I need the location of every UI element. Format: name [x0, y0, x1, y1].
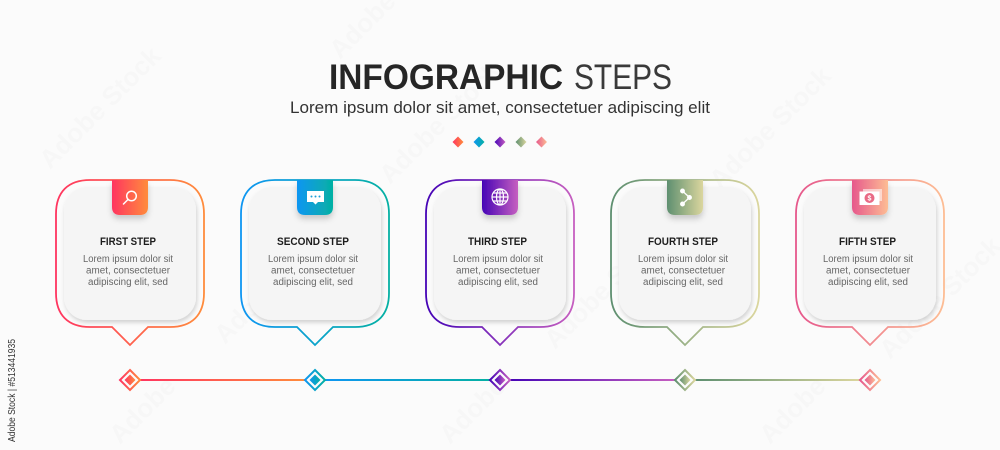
- body text: Lorem ipsum dolor sit: [638, 254, 728, 265]
- body text: amet, consectetuer: [456, 266, 541, 276]
- panel: second step: [241, 180, 389, 345]
- body text: [823, 254, 913, 288]
- watermark pattern: Adobe Stock: [703, 60, 837, 194]
- stock id caption: Adobe Stock | #513441935: [6, 339, 18, 442]
- icon: magnifier: [124, 191, 136, 204]
- body text: amet, consectetuer: [271, 266, 356, 276]
- inner card: [249, 187, 381, 320]
- tab: [667, 180, 703, 215]
- body text: Lorem ipsum dolor sit: [268, 254, 358, 265]
- watermark pattern: Adobe Stock: [33, 40, 167, 174]
- outline callout: [611, 180, 759, 345]
- subtitle: Lorem ipsum dolor sit amet, consectetuer adipiscing elit: [290, 98, 710, 117]
- heading: FIRST STEP: [100, 236, 156, 248]
- watermark pattern: Adobe: [103, 371, 181, 449]
- title: STEPS: [574, 58, 672, 97]
- body text: amet, consectetuer: [86, 266, 171, 276]
- watermark pattern: Adobe: [433, 371, 511, 449]
- marker 1: [120, 370, 140, 390]
- panel: fourth step: [611, 180, 759, 345]
- title: INFOGRAPHIC: [329, 58, 563, 97]
- decorative colour dots: [452, 136, 547, 148]
- tab: [297, 180, 333, 215]
- body text: adipiscing elit, sed: [88, 277, 168, 288]
- watermark pattern: Adobe Stock: [208, 215, 342, 349]
- heading: FOURTH STEP: [648, 236, 718, 248]
- panel: first step: [56, 180, 204, 345]
- watermark pattern: Adobe Stock: [373, 55, 507, 189]
- timeline segments: [139, 379, 860, 381]
- body text: adipiscing elit, sed: [273, 277, 353, 288]
- body text: Lorem ipsum dolor sit: [83, 254, 173, 265]
- tab: [852, 180, 888, 215]
- inner card: [434, 187, 566, 320]
- inner card: [619, 187, 751, 320]
- tab: [482, 180, 518, 215]
- outline callout: [241, 180, 389, 345]
- body text: Lorem ipsum dolor sit: [453, 254, 543, 265]
- body text: amet, consectetuer: [641, 266, 726, 276]
- body text: [268, 254, 358, 288]
- inner card: [804, 187, 936, 320]
- body text: [638, 254, 728, 288]
- icon: share: [681, 189, 691, 206]
- body text: [83, 254, 173, 288]
- body text: adipiscing elit, sed: [458, 277, 538, 288]
- timeline: [120, 370, 880, 390]
- watermark pattern: Adobe: [753, 371, 831, 449]
- watermark pattern: Adobe Stock: [538, 220, 672, 354]
- icon: banknote: [860, 189, 882, 205]
- marker 3: [490, 370, 510, 390]
- outline callout: [426, 180, 574, 345]
- body text: adipiscing elit, sed: [828, 277, 908, 288]
- tab: [112, 180, 148, 215]
- heading: FIFTH STEP: [839, 236, 896, 248]
- icon: chat bubble: [307, 191, 324, 204]
- body text: [453, 254, 543, 288]
- marker 4: [675, 370, 695, 390]
- body text: Lorem ipsum dolor sit: [823, 254, 913, 265]
- body text: amet, consectetuer: [826, 266, 911, 276]
- panel: third step: [426, 180, 574, 345]
- outline callout: [56, 180, 204, 345]
- marker 5: [860, 370, 880, 390]
- heading: THIRD STEP: [468, 236, 527, 248]
- inner card: [64, 187, 196, 320]
- icon: globe: [492, 189, 508, 205]
- heading: SECOND STEP: [277, 236, 349, 248]
- panel: fifth step: [796, 180, 944, 345]
- marker 2: [305, 370, 325, 390]
- outline callout: [796, 180, 944, 345]
- body text: adipiscing elit, sed: [643, 277, 723, 288]
- icon: banknote: $: [868, 196, 872, 202]
